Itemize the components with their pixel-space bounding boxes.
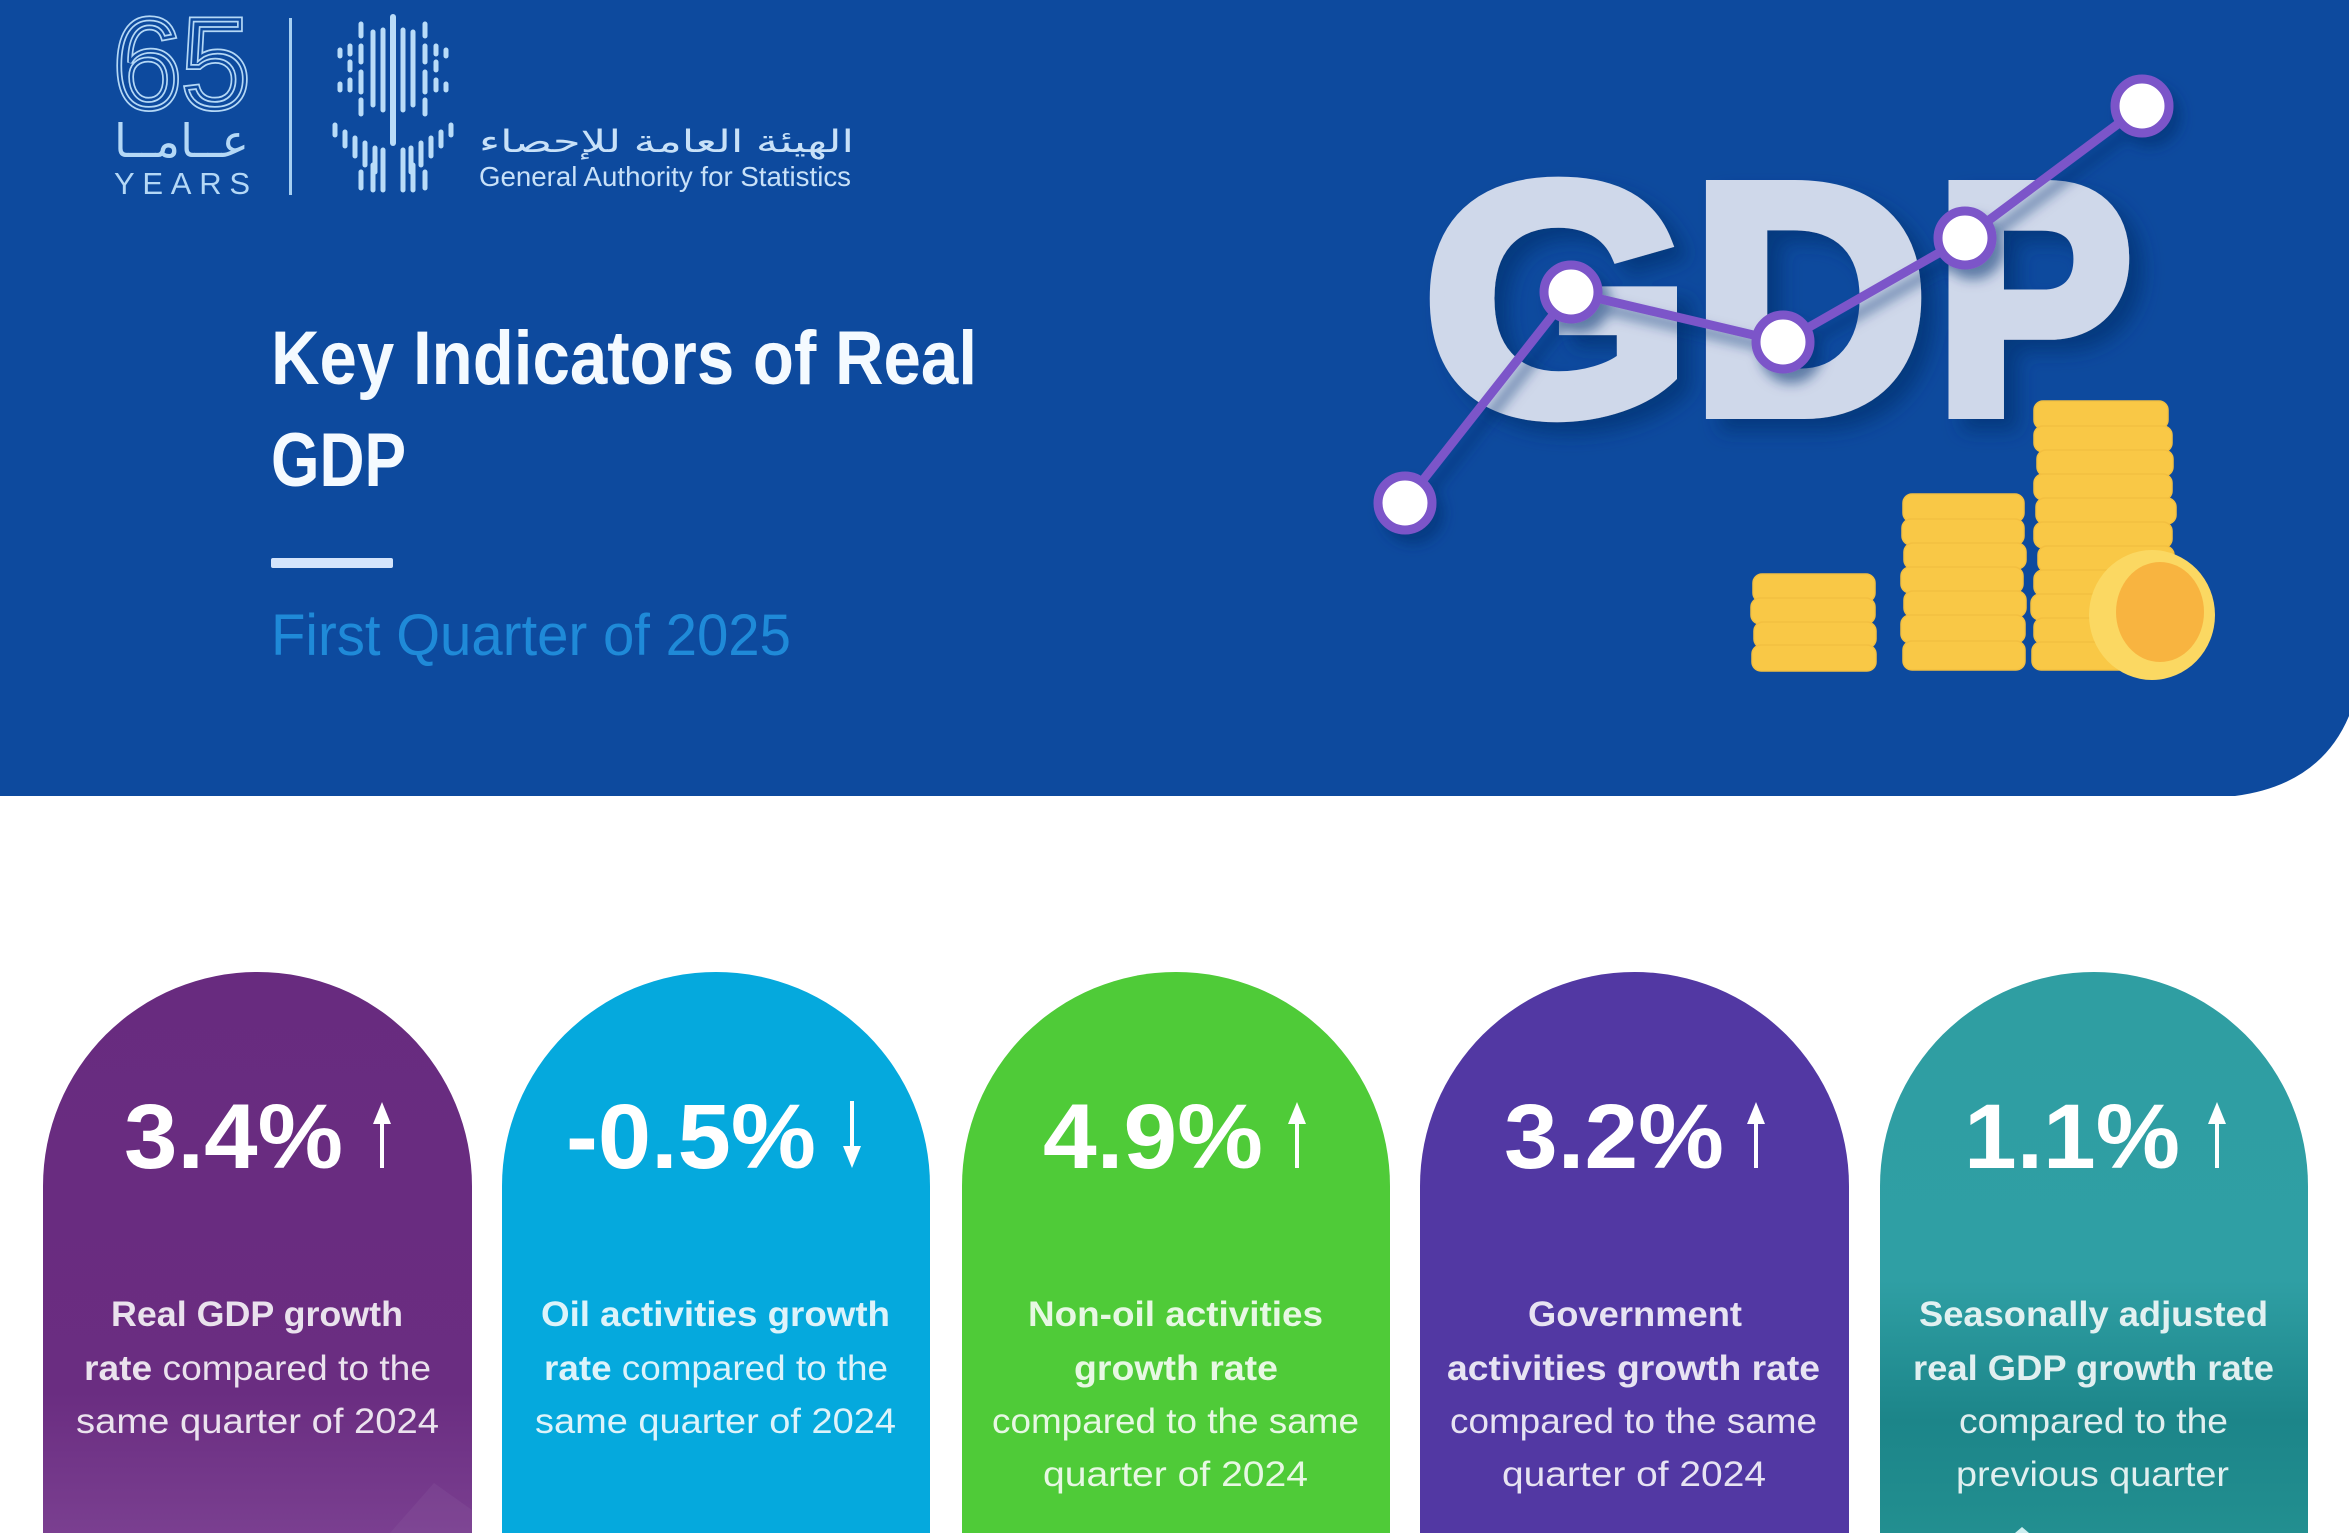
description: Seasonally adjusted [1919,1295,2268,1334]
description: Non-oil activities [1028,1295,1323,1334]
title: GDP [271,418,406,503]
description: rate compared to the [84,1349,431,1388]
GDP letters: D [1691,117,1928,482]
value: -0.5% [566,1086,816,1188]
title [271,316,977,503]
logo: English name: General Authority for Statistics [479,161,851,192]
description [76,1295,439,1441]
description: same quarter of 2024 [535,1402,896,1441]
logo: 65 years mark [113,0,250,201]
description: Government [1528,1295,1742,1334]
description: real GDP growth rate [1913,1349,2274,1388]
GDP letters: G [1423,117,1691,482]
decorative peak [390,1483,472,1533]
line chart [1378,79,2169,530]
small coin stack [1751,574,1876,671]
description: compared to the [1959,1402,2228,1441]
logo: 65 years mark: YEARS [114,166,250,201]
subtitle: First Quarter of 2025 [271,603,791,668]
decorative peak [2015,1527,2029,1533]
description: rate compared to the [544,1349,888,1388]
description: previous quarter [1956,1455,2229,1494]
arrow up [2208,1102,2226,1168]
card: non-oil activities growth [962,972,1390,1533]
description: quarter of 2024 [1043,1455,1308,1494]
card: oil activities growth [502,972,930,1533]
logo: General Authority for Statistics 65 years [113,0,854,201]
description: Oil activities growth [541,1295,890,1334]
GDP letters [1423,117,2133,482]
description: same quarter of 2024 [76,1402,439,1441]
title underline [271,558,393,568]
logo divider [289,18,292,195]
description: quarter of 2024 [1502,1455,1766,1494]
value: 1.1% [1964,1086,2180,1188]
card: government activities growth [1420,972,1849,1533]
illustration: GDP letters with line chart [1378,79,2169,530]
description: activities growth rate [1447,1349,1820,1388]
logo: palm emblem [335,17,451,190]
title: Key Indicators of Real [271,316,977,401]
description: Real GDP growth [111,1295,403,1334]
GDP letters: P [1935,117,2133,482]
arrow up [373,1102,391,1168]
arrow down [843,1101,861,1168]
leaning coin [2089,550,2215,680]
value: 3.2% [1504,1086,1724,1188]
tall coin stack [2031,401,2176,670]
arrow up [1288,1102,1306,1168]
description [535,1295,896,1441]
arrow up [1747,1102,1765,1168]
description: compared to the same [992,1402,1359,1441]
logo: Arabic name: الهيئة العامة للإحصاء [479,124,854,160]
description [1447,1295,1820,1494]
logo: 65 years mark: عــامــا [114,115,249,167]
description: growth rate [1074,1349,1278,1388]
description [1913,1295,2274,1494]
value: 3.4% [124,1086,343,1188]
description [992,1295,1359,1494]
card: seasonally adjusted growth [1880,972,2308,1533]
medium coin stack [1901,494,2026,670]
card: real GDP growth [43,972,472,1533]
illustration: coin stacks [1751,401,2215,680]
description: compared to the same [1450,1402,1817,1441]
value: 4.9% [1043,1086,1263,1188]
header band [0,0,2349,796]
